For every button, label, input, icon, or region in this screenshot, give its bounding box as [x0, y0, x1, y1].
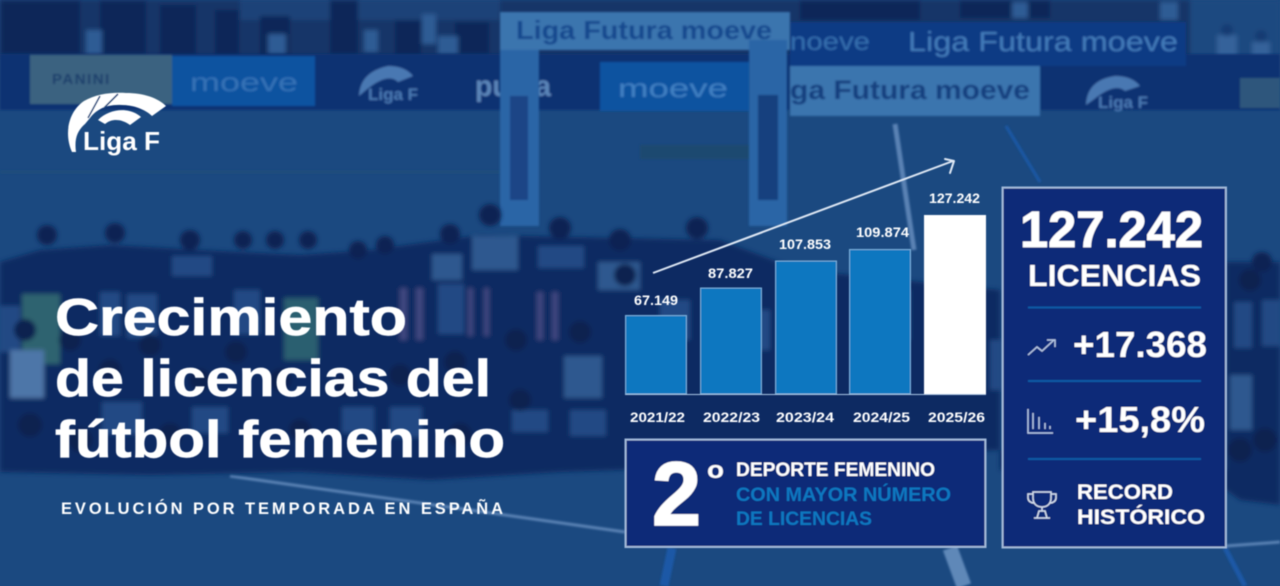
panel: key figures	[1002, 188, 1226, 548]
subtitle: EVOLUCIÓN POR TEMPORADA EN ESPAÑA	[61, 498, 503, 518]
panel: second most licensed women's sport	[626, 440, 986, 547]
bar 2024/25: 2024/25	[853, 409, 910, 425]
total licences label: LICENCIAS	[1028, 258, 1201, 293]
bar 2023/24: 107.853	[779, 236, 831, 252]
bar 2021/22: 2021/22	[630, 409, 685, 425]
percentage increase: +15,8%	[1075, 399, 1205, 440]
bar 2025/26 highlighted	[924, 190, 986, 425]
ordinal mark: o	[707, 457, 724, 484]
bar chart: licences per season	[625, 190, 986, 425]
background: advertising boards	[0, 22, 1280, 116]
background: advertising boards: Liga F	[1098, 93, 1148, 112]
icon: trend line	[1028, 340, 1055, 355]
title: fútbol femenino	[55, 411, 505, 469]
logo mark: feather swoosh	[68, 93, 166, 152]
bar 2023/24	[776, 236, 836, 425]
bar 2022/23	[700, 265, 762, 425]
bar 2023/24: 2023/24	[776, 409, 834, 425]
bar 2022/23: 2022/23	[703, 409, 760, 425]
background: advertising boards: Liga Futura moeve	[908, 26, 1178, 57]
rank caption	[736, 460, 951, 530]
background: pitch markings	[0, 124, 1280, 586]
record label: RECORD	[1077, 481, 1173, 504]
bar 2025/26 highlighted: 127.242	[929, 190, 980, 206]
rank caption: CON MAYOR NÚMERO	[736, 484, 951, 506]
background: advertising boards: noeve	[790, 28, 870, 56]
bar 2024/25	[850, 224, 910, 425]
background: advertising boards: ga Futura moeve	[790, 75, 1030, 105]
background: advertising boards: puma	[475, 70, 551, 103]
background: finish arch: Liga Futura moeve	[516, 15, 772, 45]
title: Crecimiento	[55, 289, 407, 347]
absolute increase: +17.368	[1073, 324, 1207, 365]
bar 2022/23: 87.827	[708, 265, 753, 281]
rank caption: DEPORTE FEMENINO	[736, 460, 935, 481]
icon: trophy	[1028, 492, 1056, 518]
logo wordmark: Liga F	[83, 126, 160, 156]
rank caption: DE LICENCIAS	[736, 509, 872, 530]
title	[55, 289, 505, 469]
logo inner swoosh	[98, 110, 141, 125]
record label	[1077, 481, 1205, 529]
background: finish arch	[500, 12, 790, 226]
total licences figure: 127.242	[1020, 201, 1203, 258]
background: team photo crowd	[0, 204, 1280, 505]
bar 2021/22	[626, 292, 686, 425]
background: advertising boards: moeve	[190, 67, 298, 97]
bar 2025/26 highlighted: 2025/26	[928, 409, 985, 425]
title: de licencias del	[55, 350, 491, 408]
background: advertising boards: PANINI	[52, 71, 111, 88]
icon: bar chart	[1028, 409, 1053, 433]
bar 2024/25: 109.874	[856, 224, 909, 240]
background: advertising boards: Liga F	[368, 85, 418, 104]
rank number: 2	[652, 445, 701, 545]
arrow: growth trend	[653, 159, 954, 273]
record label: HISTÓRICO	[1077, 505, 1205, 529]
logo feather cuts	[88, 94, 118, 118]
logo: Liga F	[68, 93, 166, 156]
bar 2021/22: 67.149	[634, 292, 678, 308]
background: advertising boards: moeve	[618, 73, 728, 103]
background: spectator stands	[0, 0, 1280, 70]
